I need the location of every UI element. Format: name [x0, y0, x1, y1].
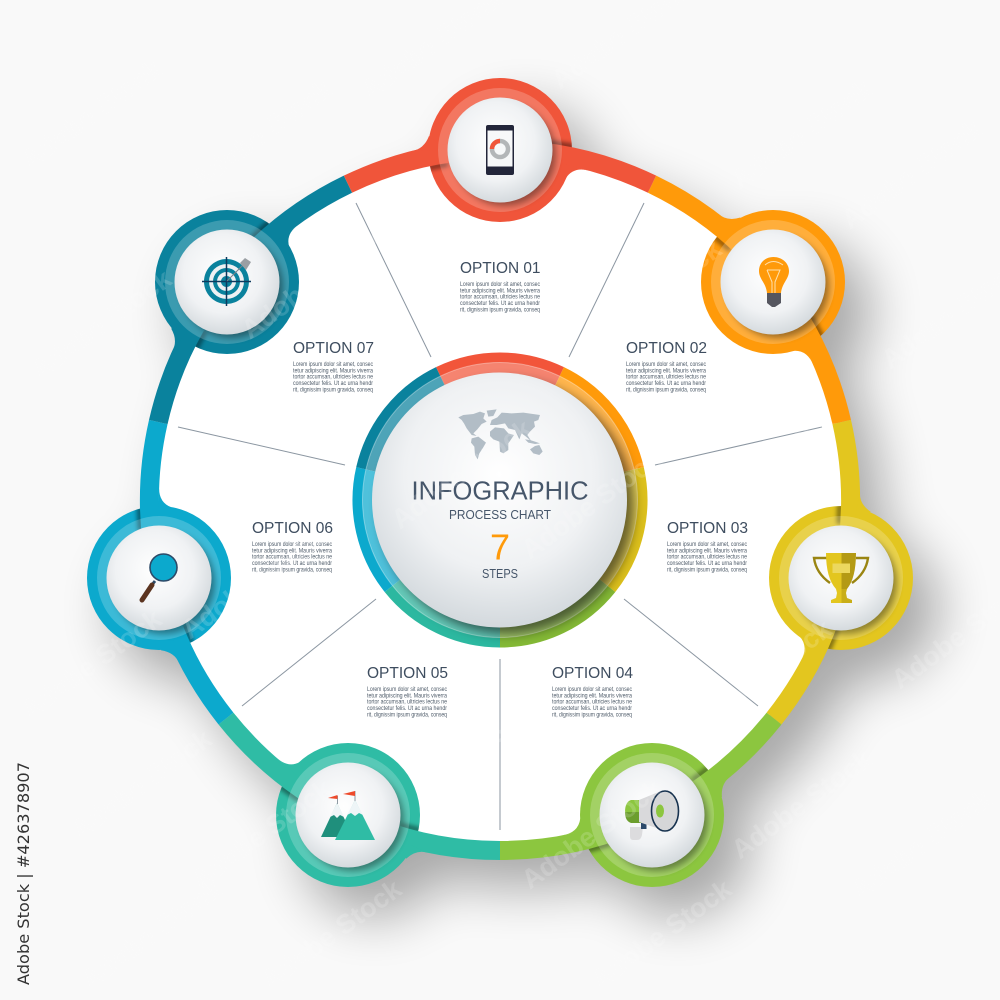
text block: option 07: OPTION 07	[293, 340, 374, 357]
center heading: 7	[490, 526, 510, 568]
text block: option 06: rit, dignissim ipsum gravida, conseq	[252, 566, 332, 573]
stock watermark: Adobe Stock	[846, 783, 998, 905]
text block: option 04: tetur adipiscing elit. Mauris viverra	[552, 692, 632, 699]
stock watermark: Adobe Stock	[76, 873, 228, 995]
stock watermark: Adobe Stock	[406, 683, 558, 805]
text block: option 04: rit, dignissim ipsum gravida, conseq	[552, 711, 632, 718]
stock watermark: Adobe Stock	[26, 263, 178, 385]
text block: option 01: Lorem ipsum dolor sit amet, consec	[460, 281, 540, 288]
text block: option 07: consectetur felis. Ut ac urna hendr	[293, 380, 373, 387]
divider lines	[178, 203, 822, 830]
text block: option 07	[293, 340, 374, 393]
option 06 node: blue, magnifier	[87, 422, 231, 729]
option 03 node: yellow, trophy	[769, 422, 913, 729]
icon: trophy	[814, 553, 868, 603]
stock watermark: Adobe Stock	[586, 873, 738, 995]
text block: option 01: rit, dignissim ipsum gravida, conseq	[460, 306, 540, 313]
text block: option 03: Lorem ipsum dolor sit amet, consec	[667, 541, 747, 548]
text block: option 03: tortor accumsan, ultricies lectus ne	[667, 554, 747, 561]
text block: option 03: consectetur felis. Ut ac urna hendr	[667, 560, 747, 567]
center heading: STEPS	[482, 566, 518, 581]
text block: option 01: tortor accumsan, ultricies lectus ne	[460, 294, 540, 301]
text block: option 02: consectetur felis. Ut ac urna hendr	[626, 380, 706, 387]
cast shadow of the chart	[113, 108, 939, 917]
text block: option 05: tetur adipiscing elit. Mauris viverra	[367, 692, 447, 699]
text block: option 04	[552, 665, 633, 718]
center heading: PROCESS CHART	[449, 507, 551, 522]
text block: option 05: OPTION 05	[367, 665, 448, 682]
text block: option 03: tetur adipiscing elit. Mauris viverra	[667, 547, 747, 554]
center heading	[412, 476, 588, 581]
world map	[458, 409, 543, 459]
stock watermark: Adobe Stock	[186, 73, 338, 195]
icon: mountains with flags	[321, 791, 375, 840]
icon: megaphone	[625, 791, 678, 840]
option 02 node: orange, bulb	[648, 176, 851, 424]
text block: option 05: consectetur felis. Ut ac urna hendr	[367, 705, 447, 712]
center heading: INFOGRAPHIC	[412, 476, 588, 506]
text block: option 01: tetur adipiscing elit. Mauris viverra	[460, 287, 540, 294]
text block: option 03: OPTION 03	[667, 520, 748, 537]
text block: option 03	[667, 520, 748, 573]
stock watermark: Adobe Stock	[66, 723, 218, 845]
stock watermark: Adobe Stock	[516, 773, 668, 895]
text block: option 05: Lorem ipsum dolor sit amet, consec	[367, 686, 447, 693]
stock watermark: Adobe Stock	[836, 113, 988, 235]
text block: option 07: tortor accumsan, ultricies lectus ne	[293, 374, 373, 381]
text block: option 06: Lorem ipsum dolor sit amet, consec	[252, 541, 332, 548]
text block: option 07: Lorem ipsum dolor sit amet, consec	[293, 361, 373, 368]
text block: option 02: Lorem ipsum dolor sit amet, consec	[626, 361, 706, 368]
stock watermark: Adobe Stock	[726, 743, 878, 865]
text block: option 02: rit, dignissim ipsum gravida, conseq	[626, 386, 706, 393]
text block: option 06: OPTION 06	[252, 520, 333, 537]
stock watermark: Adobe Stock	[186, 773, 338, 895]
text block: option 03: rit, dignissim ipsum gravida, conseq	[667, 566, 747, 573]
stock id caption: Adobe Stock | #426378907	[14, 762, 33, 985]
text block: option 01	[460, 260, 541, 313]
text block: option 04: consectetur felis. Ut ac urna hendr	[552, 705, 632, 712]
option 05 node: teal, mountains	[205, 719, 500, 894]
stock watermark: Adobe Stock	[726, 73, 878, 195]
text block: option 02	[626, 340, 707, 393]
text block: option 05	[367, 665, 448, 718]
text block: option 06	[252, 520, 333, 573]
center ring segments	[353, 363, 647, 649]
center disc	[372, 372, 627, 628]
stock watermark: Adobe Stock	[256, 873, 408, 995]
stock watermark: Adobe Stock	[516, 443, 668, 565]
stock watermark: Adobe Stock	[576, 233, 728, 355]
center disc shadow	[380, 380, 634, 634]
stock watermark: Adobe Stock	[16, 603, 168, 725]
center glass ring	[362, 362, 638, 638]
text block: option 04: tortor accumsan, ultricies lectus ne	[552, 699, 632, 706]
icon: light bulb	[759, 257, 789, 307]
text block: option 06: tetur adipiscing elit. Mauris viverra	[252, 547, 332, 554]
text block: option 04: Lorem ipsum dolor sit amet, consec	[552, 686, 632, 693]
text block: option 02: OPTION 02	[626, 340, 707, 357]
text block: option 02: tortor accumsan, ultricies lectus ne	[626, 374, 706, 381]
text block: option 05: tortor accumsan, ultricies lectus ne	[367, 699, 447, 706]
stock watermark: Adobe Stock	[686, 403, 838, 525]
text block: option 06: consectetur felis. Ut ac urna hendr	[252, 560, 332, 567]
option 04 node: green, megaphone	[500, 719, 795, 894]
stock watermark: Adobe Stock	[176, 523, 328, 645]
option 07 node: dark teal, target	[149, 176, 352, 424]
text block: option 06: tortor accumsan, ultricies lectus ne	[252, 554, 332, 561]
text block: option 07: tetur adipiscing elit. Mauris viverra	[293, 367, 373, 374]
stock watermark: Adobe Stock	[686, 613, 838, 735]
option 01 node: red, phone	[348, 78, 652, 222]
stock watermark: Adobe Stock	[236, 223, 388, 345]
icon: target	[202, 257, 251, 306]
text block: option 02: tetur adipiscing elit. Mauris viverra	[626, 367, 706, 374]
text block: option 01: OPTION 01	[460, 260, 541, 277]
text block: option 01: consectetur felis. Ut ac urna hendr	[460, 300, 540, 307]
stock watermark: Adobe Stock	[386, 413, 538, 535]
icon: magnifier	[142, 554, 177, 600]
stock watermark: Adobe Stock	[16, 53, 168, 175]
text block: option 04: OPTION 04	[552, 665, 633, 682]
text block: option 07: rit, dignissim ipsum gravida, conseq	[293, 386, 373, 393]
icon: phone	[486, 125, 514, 175]
white main disc	[155, 155, 845, 845]
text block: option 05: rit, dignissim ipsum gravida, conseq	[367, 711, 447, 718]
